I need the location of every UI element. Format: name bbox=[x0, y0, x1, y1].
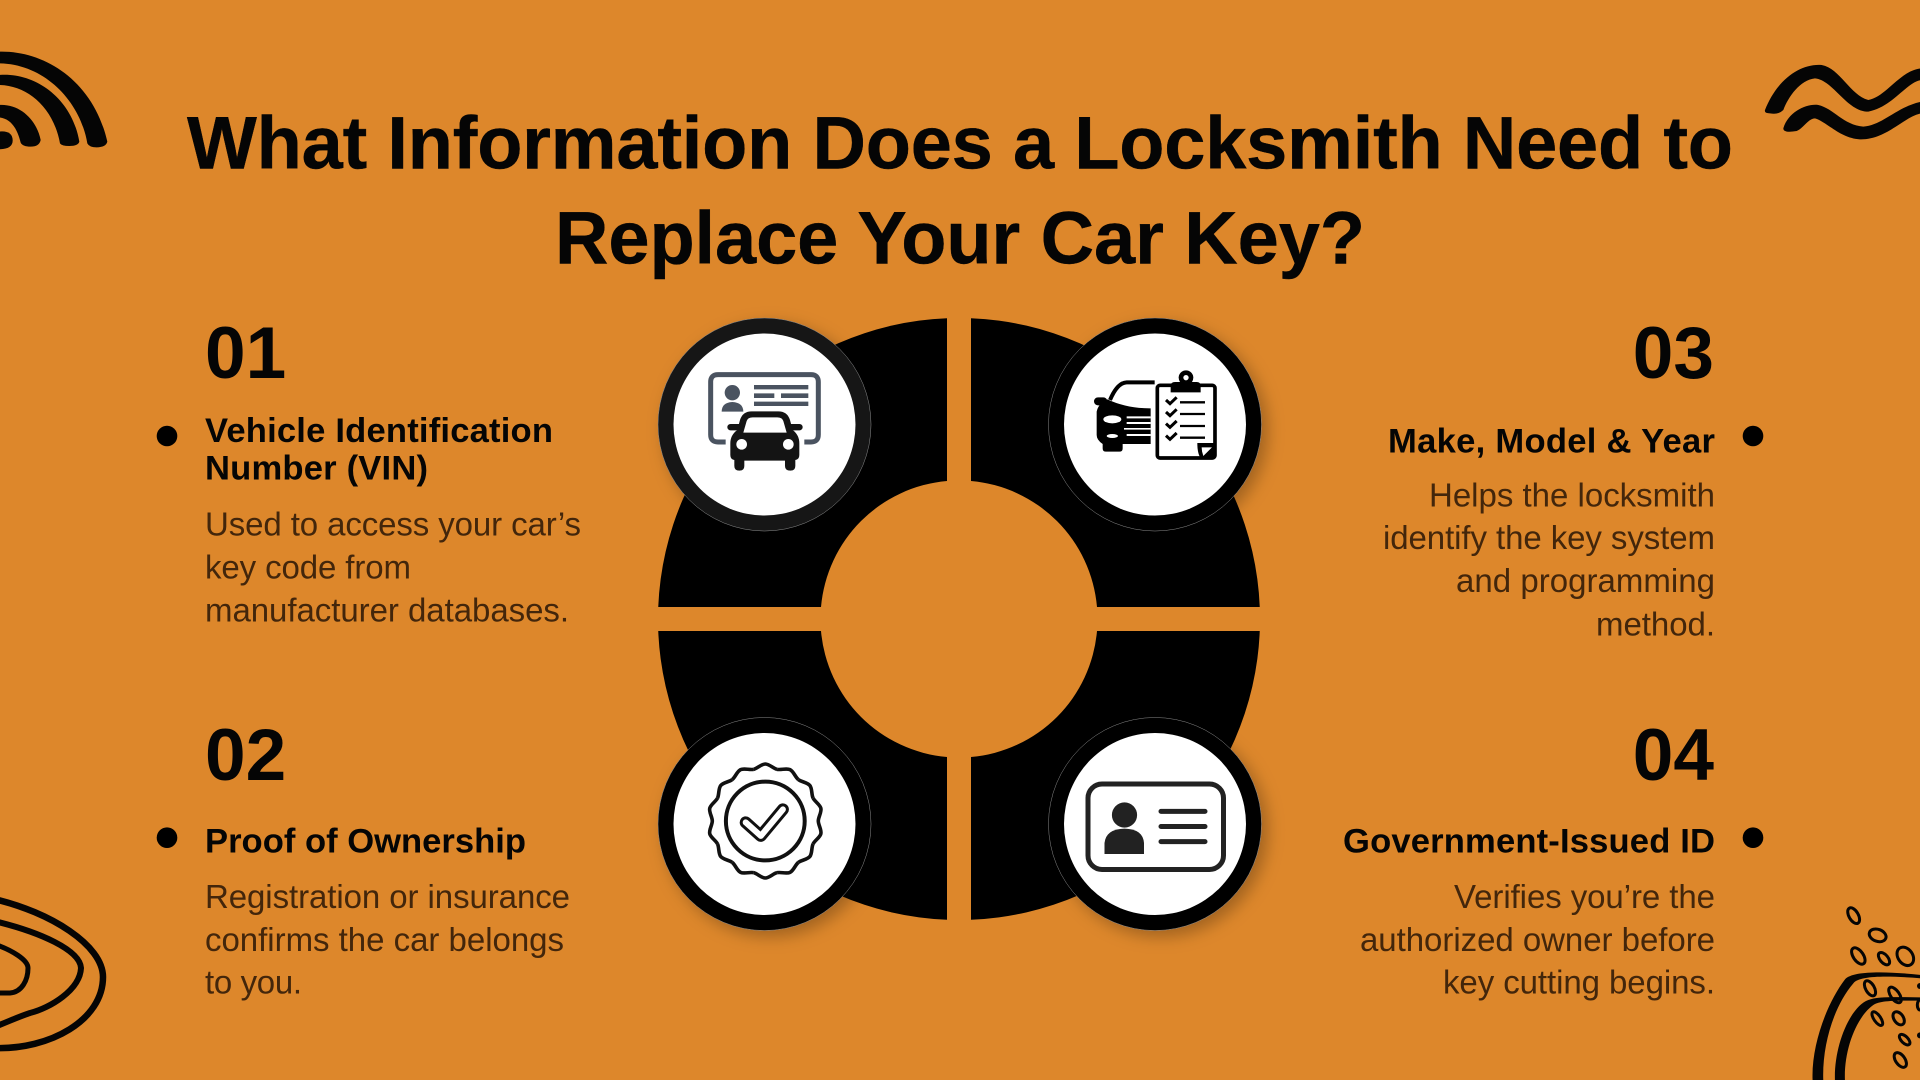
title bbox=[187, 102, 1733, 280]
panel: 03 make, model and year: Helps the locksmith bbox=[1429, 476, 1715, 514]
icon: government ID card bbox=[1048, 718, 1262, 930]
panel: 03 make, model and year: Make, Model & Year bbox=[1388, 422, 1715, 460]
icon: verified badge bbox=[658, 718, 871, 930]
panel: 04 government-issued ID: key cutting begins. bbox=[1443, 964, 1715, 1000]
title: What Information Does a Locksmith Need to bbox=[187, 102, 1733, 184]
title: Replace Your Car Key? bbox=[555, 196, 1365, 280]
decoration: bottom-left contour rings bbox=[0, 899, 103, 1048]
decoration: top-right waves bbox=[1765, 65, 1920, 139]
panel: 04 government-issued ID: Verifies you’re the bbox=[1454, 878, 1715, 915]
icon: ID card with car bbox=[658, 318, 871, 531]
panel: 03 make, model and year bbox=[1383, 313, 1763, 642]
panel: 03 make, model and year: 03 bbox=[1633, 313, 1714, 394]
panel: 03 make, model and year: and programming bbox=[1456, 562, 1715, 599]
panel: 02 proof of ownership: 02 bbox=[205, 715, 286, 796]
panel: 02 proof of ownership: Proof of Ownership bbox=[205, 822, 526, 860]
icon: car with checklist bbox=[1048, 318, 1262, 531]
panel: 01 vehicle identification number: manufacturer databases. bbox=[205, 592, 569, 628]
panel: 04 government-issued ID bbox=[1343, 715, 1763, 1000]
decoration: top-left arcs bbox=[0, 52, 107, 149]
panel: 04 government-issued ID: authorized owner before bbox=[1360, 921, 1715, 958]
panel: 01 vehicle identification number: 01 bbox=[205, 313, 286, 394]
panel: 01 vehicle identification number: key code from bbox=[205, 548, 411, 586]
panel: 04 government-issued ID: 04 bbox=[1633, 715, 1714, 796]
panel: 01 vehicle identification number bbox=[157, 313, 581, 628]
panel: 01 vehicle identification number: Used to access your car’s bbox=[205, 506, 581, 542]
panel: 01 vehicle identification number: Vehicle Identification bbox=[205, 412, 553, 450]
panel: 03 make, model and year: method. bbox=[1596, 606, 1715, 642]
chart: four-segment ring bbox=[658, 318, 1260, 920]
panel: 01 vehicle identification number: Number (VIN) bbox=[205, 450, 428, 488]
panel: 02 proof of ownership: confirms the car belongs bbox=[205, 921, 564, 958]
panel: 02 proof of ownership bbox=[157, 715, 570, 1000]
decoration: bottom-right arcs and seeds bbox=[1812, 906, 1920, 1080]
panel: 03 make, model and year: identify the key system bbox=[1383, 519, 1715, 556]
panel: 04 government-issued ID: Government-Issued ID bbox=[1343, 822, 1715, 860]
panel: 02 proof of ownership: to you. bbox=[205, 964, 302, 1000]
panel: 02 proof of ownership: Registration or insurance bbox=[205, 878, 570, 915]
